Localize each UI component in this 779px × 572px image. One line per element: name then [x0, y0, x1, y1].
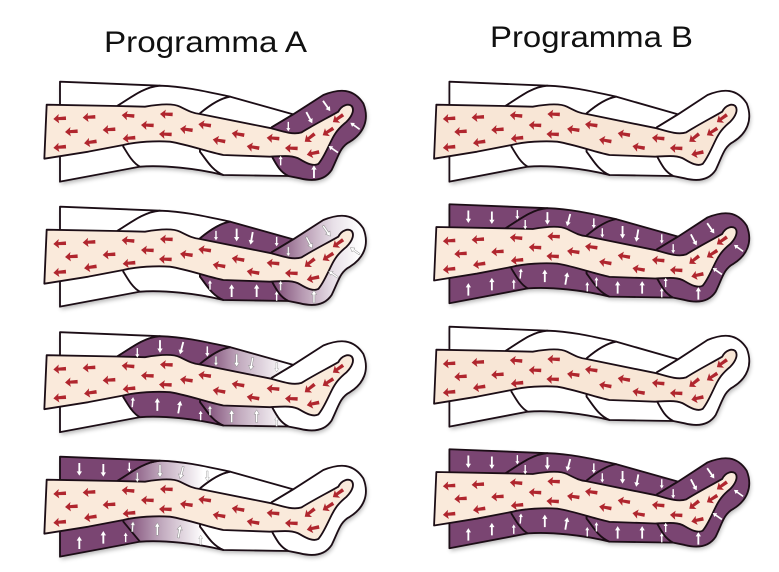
leg B3: all chambers deflated — [434, 327, 750, 429]
title: Programma B: Programma B — [490, 21, 693, 54]
leg A2: calf chamber inflated, foot fading — [44, 207, 367, 309]
leg B2: all chambers inflated — [434, 204, 750, 306]
leg B1: all chambers deflated — [434, 82, 750, 184]
leg A4: thigh chamber inflated, knee fading — [44, 457, 367, 559]
leg A3: knee chamber inflated, calf fading — [44, 332, 367, 435]
leg A1: foot chamber inflated — [44, 82, 367, 184]
leg B4: all chambers inflated — [434, 449, 750, 551]
title: Programma A: Programma A — [104, 26, 307, 59]
